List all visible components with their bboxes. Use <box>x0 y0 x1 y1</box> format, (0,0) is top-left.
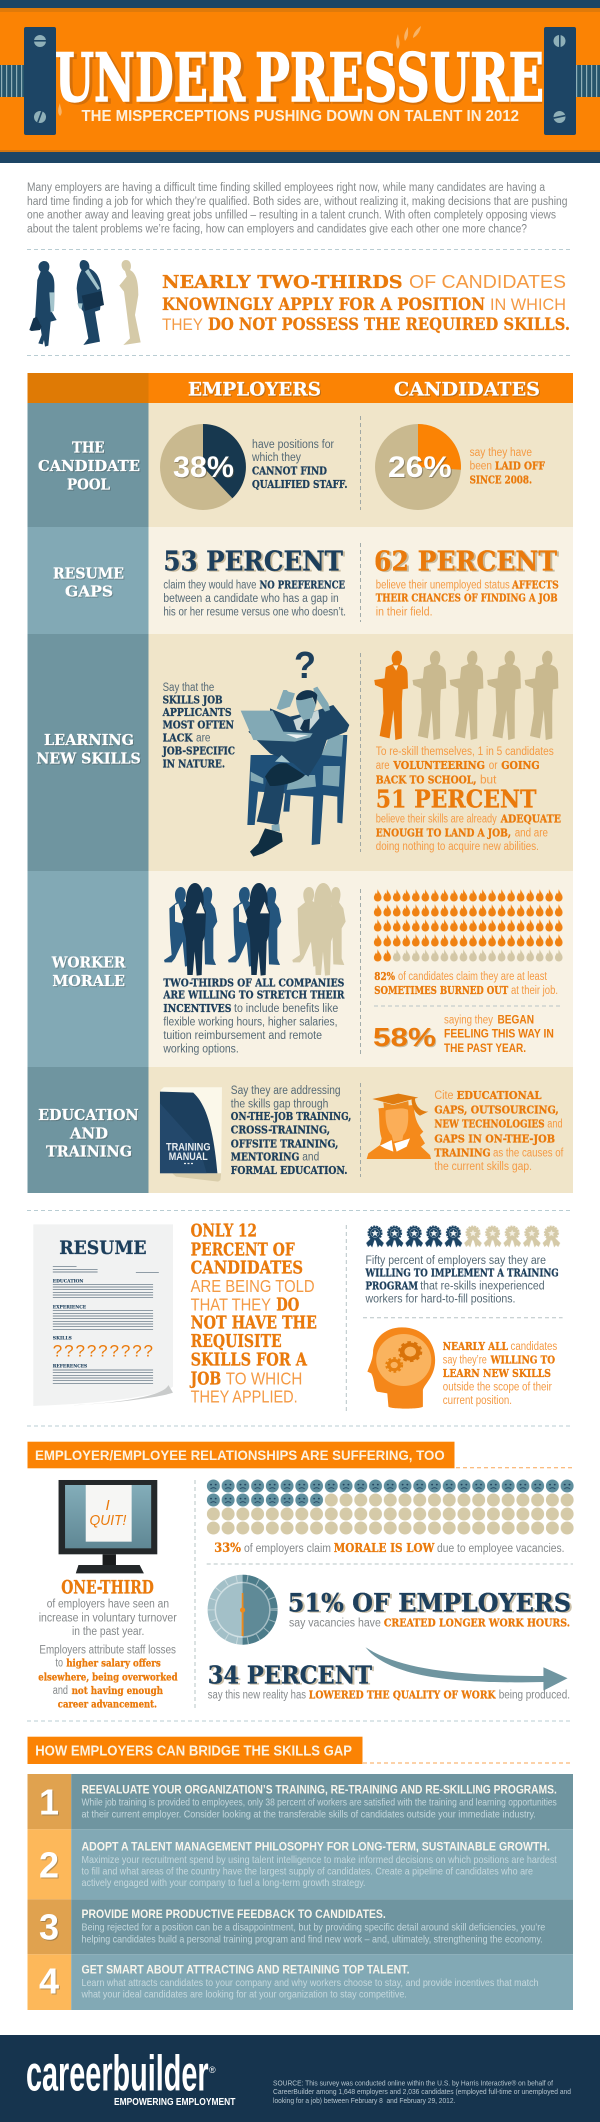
row: worker morale <box>28 871 573 1067</box>
source note: CareerBuilder among 1,648 employers and 2,036 candidates (employed full-time or unemployed and <box>273 2087 571 2096</box>
row heading: GAPS <box>65 583 113 601</box>
callout: only 12 percent <box>189 1222 317 1407</box>
employer text: and <box>302 1152 319 1164</box>
stat: 34 percent: LOWERED THE QUALITY OF WORK <box>309 1688 496 1702</box>
candidate text: GAPS IN ON-THE-JOB <box>434 1131 555 1145</box>
title: UNDER <box>55 39 246 117</box>
stat: 58 percent <box>373 1012 554 1055</box>
candidate text: GAPS, OUTSOURCING, <box>434 1102 559 1116</box>
candidate text <box>376 746 561 853</box>
employer stat: claim they would have <box>163 580 256 592</box>
headline: nearly two-thirds: KNOWINGLY APPLY FOR A POSITION <box>162 295 485 314</box>
morale stat text: due to employee vacancies. <box>437 1543 564 1555</box>
training program text <box>365 1255 559 1306</box>
section heading: relationships <box>28 1442 454 1468</box>
headline: nearly two-thirds: NEARLY TWO-THIRDS <box>162 272 403 293</box>
icon: resume document <box>33 1224 173 1406</box>
icon: left vise clamp <box>0 27 56 135</box>
candidate text: GOING <box>501 758 540 772</box>
icon: resume document: RESUME <box>59 1237 147 1259</box>
candidate text: are <box>376 760 390 772</box>
step 3 <box>28 1899 573 1954</box>
employer text: APPLICANTS <box>162 706 232 719</box>
step 4: what your ideal candidates are looking for at your organization to stay competitive. <box>81 1988 407 2000</box>
stat: one-third turnover: elsewhere, being overworked <box>38 1671 178 1683</box>
candidate stat: AFFECTS <box>511 579 559 592</box>
employer text: INCENTIVES <box>163 1001 232 1015</box>
logo: careerbuilder: careerbuilder <box>26 2046 209 2102</box>
employer text: LACK <box>163 732 193 745</box>
morale stat text: 33% <box>214 1541 242 1556</box>
pie chart: 26 percent <box>375 424 461 510</box>
training program text: that re-skills inexperienced <box>420 1280 545 1292</box>
icon: computer monitor with quit note <box>59 1480 157 1573</box>
candidate text: NEW TECHNOLOGIES <box>434 1116 545 1130</box>
candidate text: been <box>470 460 492 472</box>
candidate text: 51 PERCENT <box>376 784 537 813</box>
stat: one-third turnover: and <box>53 1685 68 1697</box>
burned out stat text <box>374 970 558 997</box>
candidate text: and are <box>515 828 548 840</box>
candidate text: the current skills gap. <box>434 1161 532 1173</box>
icon: resume document: EXPERIENCE <box>53 1304 87 1310</box>
stat: one-third turnover: of employers have seen an <box>47 1599 169 1611</box>
row heading: WORKER <box>51 953 126 971</box>
employer text: which they <box>251 452 301 464</box>
stat: 34 percent: 34 PERCENT <box>208 1660 372 1689</box>
employer text: JOB-SPECIFIC <box>162 744 235 757</box>
logo: careerbuilder: EMPOWERING EMPLOYMENT <box>114 2097 235 2108</box>
subtitle: THE MISPERCEPTIONS PUSHING DOWN ON TALENT IN 2012 <box>82 108 519 125</box>
logo: careerbuilder <box>26 2046 235 2108</box>
stat: 58 percent: 58% <box>373 1022 436 1052</box>
employer text: ON-THE-JOB TRAINING, <box>231 1110 351 1123</box>
row heading <box>36 731 141 767</box>
employer stat: NO PREFERENCE <box>260 579 345 592</box>
stat: 34 percent: say this new reality has <box>208 1690 306 1702</box>
comparison table header: CANDIDATES <box>394 379 540 401</box>
candidate text: BACK TO SCHOOL, <box>376 772 476 786</box>
row heading: AND <box>69 1124 108 1142</box>
pie chart: 38 percent: 38% <box>173 451 234 484</box>
pictogram: burned out flames <box>373 889 564 964</box>
employer text: tuition reimbursement and remote <box>163 1030 322 1042</box>
candidate stat: believe their unemployed status <box>376 580 510 592</box>
learn new skills text <box>443 1340 557 1407</box>
employer text: Say that the <box>163 682 214 694</box>
employer text: to include benefits like <box>234 1003 338 1015</box>
candidate text: To re-skill themselves, 1 in 5 candidates <box>376 746 554 758</box>
learn new skills text: NEARLY ALL <box>443 1340 508 1353</box>
headline: nearly two-thirds: IN WHICH <box>490 296 566 314</box>
row heading: EDUCATION <box>38 1106 139 1124</box>
icon: head with gears <box>367 1327 435 1409</box>
title <box>55 39 544 119</box>
icon: one in five candidates figures <box>374 651 558 740</box>
arrow <box>365 1647 568 1691</box>
row heading: TRAINING <box>46 1143 132 1161</box>
header banner <box>0 0 600 163</box>
morale stat text: MORALE IS LOW <box>334 1541 435 1555</box>
stat: one-third turnover: to <box>56 1658 63 1670</box>
row heading: THE <box>72 439 104 457</box>
candidate text: VOLUNTEERING <box>393 758 485 772</box>
row heading <box>53 564 124 601</box>
learn new skills text: outside the scope of their <box>443 1382 552 1394</box>
candidate stat: THEIR CHANCES OF FINDING A JOB <box>376 592 558 605</box>
pictogram: award ribbons <box>365 1225 561 1249</box>
pictogram: morale faces <box>206 1479 574 1535</box>
employer text: MOST OFTEN <box>163 718 234 731</box>
stat: 51 percent of employers: say vacancies have <box>289 1618 381 1630</box>
comparison table header: EMPLOYERS <box>188 379 321 401</box>
stat: one-third turnover: not having enough <box>72 1685 163 1697</box>
row heading: NEW SKILLS <box>36 749 141 767</box>
section heading: relationships: EMPLOYER/EMPLOYEE RELATIONSHIPS ARE SUFFERING, TOO <box>35 1447 445 1463</box>
callout: only 12 percent: ARE BEING TOLD <box>191 1276 315 1296</box>
employer text: MENTORING <box>231 1151 299 1164</box>
employer stat <box>163 547 346 618</box>
stat: 34 percent <box>208 1660 570 1702</box>
candidate text: and <box>547 1118 563 1130</box>
step 1: 1 <box>39 1781 59 1822</box>
employer text: flexible working hours, higher salaries, <box>163 1017 338 1029</box>
section heading: bridge the skills gap: HOW EMPLOYERS CAN BRIDGE THE SKILLS GAP <box>35 1744 352 1760</box>
candidate stat: 62 PERCENT <box>374 547 557 578</box>
learn new skills text: WILLING TO <box>490 1353 555 1366</box>
candidate text: TRAINING <box>434 1146 491 1160</box>
employer text: QUALIFIED STAFF. <box>252 478 348 491</box>
row: the candidate pool <box>28 403 573 527</box>
stat: 58 percent: FEELING THIS WAY IN <box>444 1026 554 1040</box>
row heading <box>51 953 126 990</box>
employer text: CROSS-TRAINING, <box>231 1124 330 1137</box>
row heading <box>38 439 140 494</box>
candidate text: SINCE 2008. <box>470 474 532 487</box>
candidate text: as the causes of <box>493 1148 564 1160</box>
step 4: GET SMART ABOUT ATTRACTING AND RETAINING TOP TALENT. <box>82 1962 410 1976</box>
learn new skills text: candidates <box>510 1341 557 1353</box>
candidate text: doing nothing to acquire new abilities. <box>376 841 539 853</box>
row heading <box>38 1106 139 1161</box>
icon: resume document: ????????? <box>53 1342 153 1361</box>
source note: looking for a job) between February 8 and February 29, 2012. <box>273 2096 455 2105</box>
stat: 58 percent: BEGAN <box>498 1012 534 1026</box>
stat: one-third turnover <box>38 1576 178 1710</box>
callout: only 12 percent: REQUISITE <box>191 1332 282 1352</box>
candidate text: or <box>489 760 498 772</box>
training program text: PROGRAM <box>366 1279 418 1292</box>
employer text: ARE WILLING TO STRETCH THEIR <box>163 988 345 1002</box>
stat: one-third turnover: career advancement. <box>58 1698 157 1710</box>
callout: only 12 percent: JOB <box>189 1369 221 1389</box>
burned out stat text: SOMETIMES BURNED OUT <box>374 984 509 997</box>
comparison table header <box>28 373 573 403</box>
employer text: the skills gap through <box>231 1098 328 1110</box>
candidate text: believe their skills are already <box>376 813 497 825</box>
headline: nearly two-thirds: OF CANDIDATES <box>409 272 566 292</box>
row heading: LEARNING <box>44 731 134 749</box>
icon: stressed man with laptop in chair <box>241 687 349 857</box>
row heading: MORALE <box>52 972 125 990</box>
row heading: RESUME <box>53 564 124 582</box>
icon: right vise clamp <box>544 27 600 135</box>
step 2: to fill and what areas of the country have the largest supply of candidates. Create a pipeline of candidates who are <box>82 1866 533 1878</box>
candidate text: Cite <box>434 1090 454 1102</box>
step 2: ADOPT A TALENT MANAGEMENT PHILOSOPHY FOR LONG-TERM, SUSTAINABLE GROWTH. <box>82 1839 550 1853</box>
icon: training manual book: MANUAL <box>169 1151 208 1163</box>
row: education and training <box>28 1067 573 1193</box>
section heading: bridge the skills gap <box>28 1737 362 1764</box>
row heading: POOL <box>67 476 110 494</box>
step 2 <box>28 1829 573 1899</box>
intro paragraph: Many employers are having a difficult time finding skilled employees right now, while many candidates are having a <box>27 182 546 194</box>
icon: training manual book: TRAINING <box>166 1142 210 1154</box>
employer text: SKILLS JOB <box>163 694 223 707</box>
callout: only 12 percent: CANDIDATES <box>191 1258 303 1278</box>
step 1 <box>28 1774 573 1829</box>
headline: nearly two-thirds: THEY <box>162 316 203 334</box>
row heading: CANDIDATE <box>38 457 140 475</box>
headline: nearly two-thirds: DO NOT POSSESS THE REQUIRED SKILLS. <box>208 315 570 334</box>
morale stat text: of employers claim <box>244 1543 331 1555</box>
employer text: IN NATURE. <box>163 757 225 770</box>
icon: question mark: ? <box>294 645 316 687</box>
callout: only 12 percent: PERCENT OF <box>191 1240 295 1260</box>
candidate stat <box>374 547 559 618</box>
icon: training manual book <box>160 1087 222 1182</box>
icon: computer monitor with quit note: I <box>106 1497 110 1514</box>
stat: 58 percent: saying they <box>444 1014 493 1026</box>
pie chart: 38 percent <box>160 424 246 510</box>
employer text: TWO-THIRDS OF ALL COMPANIES <box>163 976 344 990</box>
icon: resume document: SKILLS <box>53 1336 72 1342</box>
employer stat: his or her resume versus one who doesn’t. <box>163 606 346 618</box>
title: UNDER <box>58 41 249 119</box>
employer text: FORMAL EDUCATION. <box>231 1164 348 1177</box>
employer text <box>162 682 235 770</box>
employer text: Say they are addressing <box>231 1085 341 1097</box>
employer stat: 53 PERCENT <box>163 547 343 578</box>
employer text: have positions for <box>252 439 334 451</box>
icon: graduate <box>367 1094 431 1159</box>
training program text: Fifty percent of employers say they are <box>366 1255 546 1267</box>
burned out stat text: of candidates claim they are at least <box>398 971 548 983</box>
callout: only 12 percent: TO WHICH <box>226 1368 302 1388</box>
learn new skills text: LEARN NEW SKILLS <box>443 1367 551 1380</box>
employer text: working options. <box>162 1043 239 1055</box>
candidate text <box>434 1088 564 1173</box>
candidate text: ENOUGH TO LAND A JOB, <box>376 826 511 840</box>
icon: resume document: EDUCATION <box>53 1278 83 1284</box>
employer text <box>251 439 348 491</box>
burned out stat text: at their job. <box>511 985 558 997</box>
row: learning new skills <box>28 634 573 871</box>
icon: resume document: REFERENCES <box>53 1364 87 1370</box>
stat: one-third turnover: ONE-THIRD <box>61 1576 154 1598</box>
step 4: 4 <box>39 1960 59 2001</box>
stat: 51 percent of employers: 51% OF EMPLOYERS <box>288 1589 571 1618</box>
step 3: 3 <box>39 1906 59 1947</box>
step 4 <box>28 1954 573 2010</box>
burned out stat text: 82% <box>374 970 395 983</box>
icon: three employee groups <box>164 883 346 976</box>
logo: careerbuilder: ® <box>209 2065 216 2075</box>
stat: one-third turnover: higher salary offers <box>66 1658 161 1670</box>
stat: 34 percent: being produced. <box>499 1690 570 1702</box>
pie chart: 26 percent: 26% <box>388 451 452 484</box>
intro paragraph: about the talent problems we’re facing, how can employers and candidates give each other one more chance? <box>27 223 527 235</box>
step 3: PROVIDE MORE PRODUCTIVE FEEDBACK TO CANDIDATES. <box>82 1907 386 1921</box>
candidate text: but <box>480 774 497 786</box>
candidate text: say they have <box>470 447 532 459</box>
callout: only 12 percent: NOT HAVE THE <box>191 1314 317 1334</box>
candidate text: LAID OFF <box>495 459 545 472</box>
stat: 51 percent of employers <box>288 1589 571 1630</box>
learn new skills text: current position. <box>443 1395 512 1407</box>
candidate text: EDUCATIONAL <box>457 1088 542 1102</box>
source note: SOURCE: This survey was conducted online within the U.S. by Harris Interactive® on behalf of <box>273 2078 554 2087</box>
callout: only 12 percent: DO <box>276 1295 299 1315</box>
employer text <box>231 1085 351 1177</box>
callout: only 12 percent: THEY APPLIED. <box>191 1387 298 1407</box>
callout: only 12 percent: SKILLS FOR A <box>191 1351 307 1371</box>
training program text: workers for hard-to-fill positions. <box>365 1294 516 1306</box>
stat: 58 percent: THE PAST YEAR. <box>444 1041 526 1055</box>
employer text: are <box>196 733 210 745</box>
candidate text: ADEQUATE <box>500 811 561 825</box>
step 1: at their current employer. Consider looking at the transferable skills of candidates outside your immediate industry. <box>82 1808 536 1820</box>
callout: only 12 percent: ONLY 12 <box>191 1222 257 1242</box>
employer text: OFFSITE TRAINING, <box>231 1137 338 1150</box>
employer stat: between a candidate who has a gap in <box>163 593 339 605</box>
learn new skills text: say they’re <box>443 1354 487 1366</box>
candidate stat: in their field. <box>376 606 432 618</box>
callout: only 12 percent: THAT THEY <box>191 1294 271 1314</box>
icon: three job seeker silhouettes <box>29 260 141 347</box>
stat: one-third turnover: in the past year. <box>72 1626 144 1638</box>
stat: one-third turnover: Employers attribute staff losses <box>39 1644 176 1656</box>
employer text <box>162 976 345 1055</box>
icon: computer monitor with quit note: QUIT! <box>90 1512 127 1529</box>
footer <box>0 2035 600 2122</box>
step 2: 2 <box>39 1844 59 1885</box>
source note <box>273 2078 571 2105</box>
candidate text <box>470 447 545 487</box>
icon: sweat drops <box>58 26 421 116</box>
stat: one-third turnover: increase in voluntary turnover <box>39 1612 177 1624</box>
icon: clock half elapsed <box>208 1575 278 1645</box>
row: resume gaps <box>28 527 573 634</box>
employer text: CANNOT FIND <box>252 465 327 478</box>
morale stat text <box>214 1541 565 1556</box>
headline: nearly two-thirds <box>162 272 570 334</box>
step 2: actively engaged with your company to fuel a long-term growth strategy. <box>82 1877 366 1889</box>
intro paragraph <box>27 182 568 235</box>
